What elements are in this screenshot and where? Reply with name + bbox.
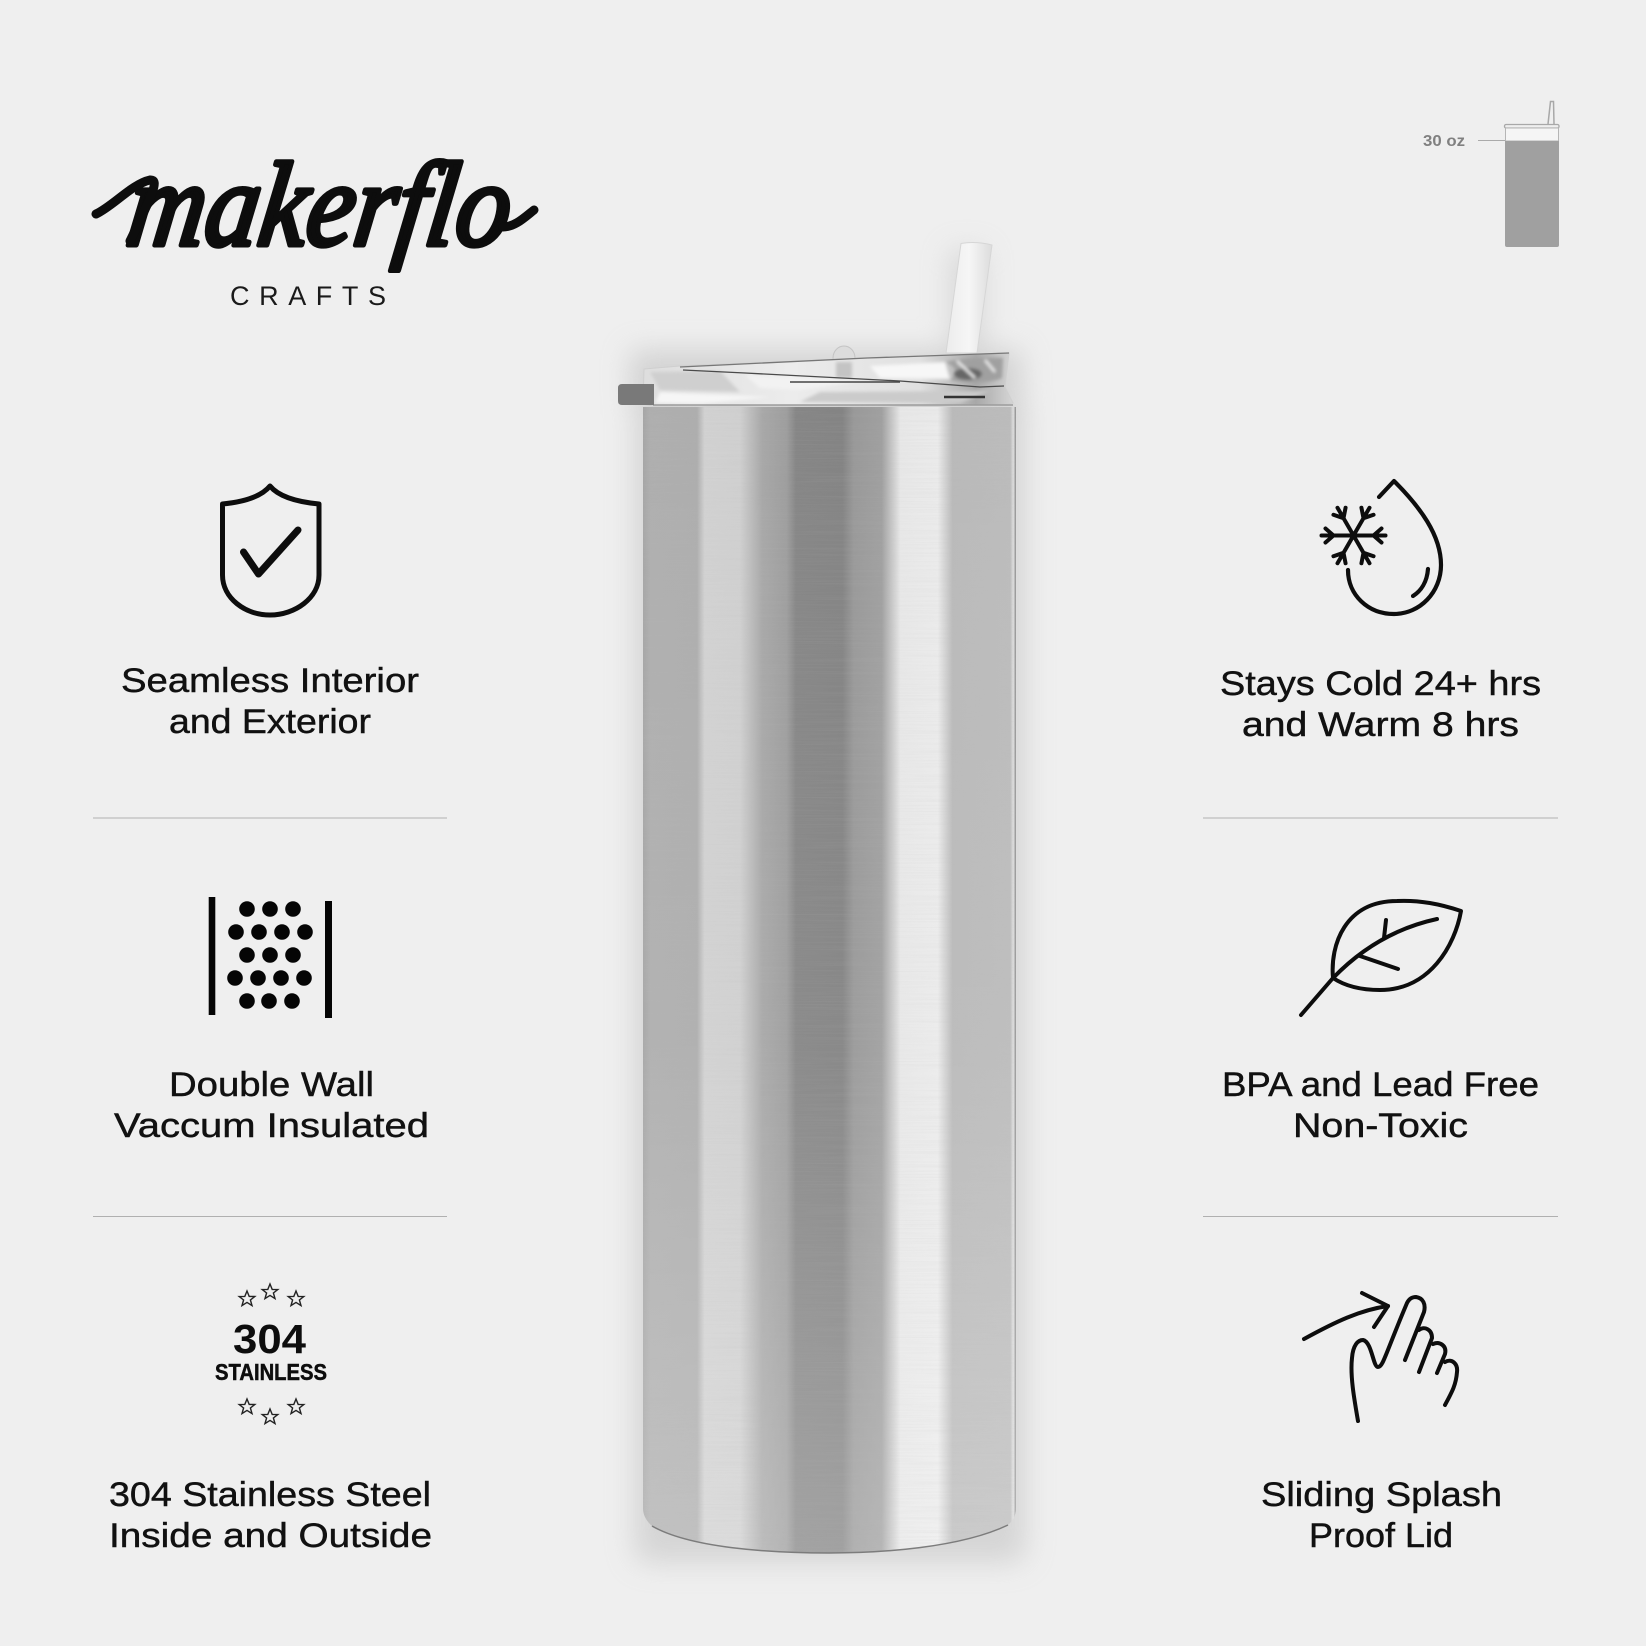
feature: double wall vacuum insulated	[114, 897, 429, 1145]
feature label	[1220, 665, 1541, 744]
icon: double wall with dots	[209, 897, 332, 1018]
feature label: Double Wall	[169, 1066, 374, 1104]
feature label: Sliding Splash	[1261, 1476, 1502, 1514]
feature label: Inside and Outside	[109, 1517, 432, 1555]
feature label: and Warm 8 hrs	[1242, 706, 1519, 744]
feature label: BPA and Lead Free	[1222, 1066, 1539, 1104]
size indicator: 30 oz	[1423, 102, 1559, 247]
icon: 304 stainless badge: 304	[233, 1316, 306, 1362]
icon: 304 stainless badge: STAINLESS	[215, 1359, 327, 1385]
size leader line	[1478, 140, 1506, 142]
feature: seamless interior and exterior	[121, 486, 419, 741]
straw	[946, 243, 992, 353]
feature: stays cold and warm	[1220, 481, 1541, 744]
feature label	[121, 662, 419, 741]
logo subtitle: CRAFTS	[230, 281, 386, 311]
feature: bpa and lead free	[1222, 901, 1539, 1145]
feature label: Vaccum Insulated	[114, 1107, 429, 1145]
size label: 30 oz	[1423, 133, 1465, 150]
feature label	[109, 1476, 432, 1555]
tumbler body	[643, 407, 1016, 1554]
feature: 304 stainless steel	[109, 1284, 432, 1555]
icon: 304 stainless badge	[215, 1284, 327, 1424]
clear lid	[643, 353, 1013, 406]
logo wordmark: makerflo	[120, 140, 521, 272]
feature label: Seamless Interior	[121, 662, 419, 700]
feature label: 304 Stainless Steel	[109, 1476, 431, 1514]
feature label: Proof Lid	[1309, 1517, 1453, 1555]
icon: leaf	[1301, 901, 1461, 1015]
tumbler shadow	[630, 250, 1026, 1563]
icon: shield with check	[222, 486, 319, 615]
mini tumbler icon	[1504, 102, 1559, 247]
brand logo: makerflo crafts	[96, 140, 534, 311]
feature: sliding splash proof lid	[1261, 1293, 1502, 1555]
icon: hand swipe with arrow	[1304, 1293, 1457, 1421]
feature label: Stays Cold 24+ hrs	[1220, 665, 1541, 703]
logo swashes	[96, 180, 534, 241]
tumbler product image	[618, 243, 1026, 1563]
lid tab	[618, 384, 654, 405]
icon: drop with snowflake	[1322, 481, 1441, 614]
feature label: and Exterior	[169, 703, 371, 741]
lid knob	[833, 346, 855, 370]
feature label: Non-Toxic	[1293, 1107, 1468, 1145]
feature label	[1261, 1476, 1502, 1555]
feature label	[114, 1066, 429, 1145]
feature label	[1222, 1066, 1539, 1145]
